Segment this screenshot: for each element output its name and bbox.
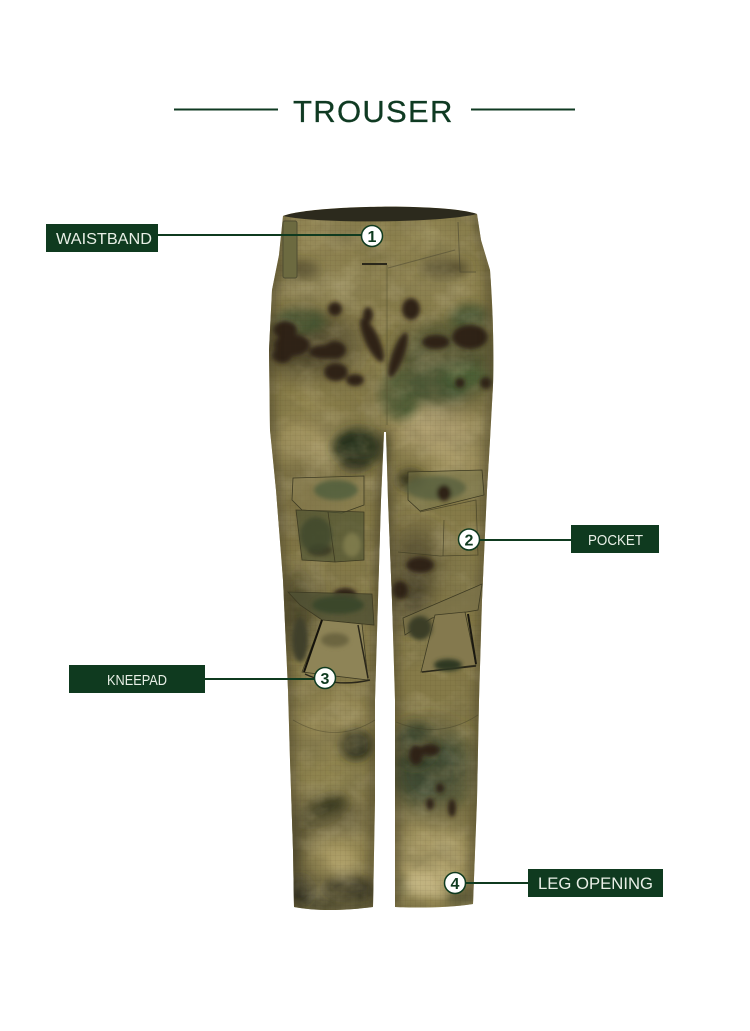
marker 3 — [314, 668, 336, 688]
label: POCKET — [571, 525, 659, 553]
trousers illustration — [260, 200, 500, 920]
edge shading — [269, 214, 493, 907]
kneepad panels — [288, 584, 482, 732]
waistband inner shadow — [283, 207, 477, 221]
marker 2 — [458, 529, 480, 550]
label: WAISTBAND — [46, 224, 158, 252]
label: KNEEPAD — [69, 665, 205, 693]
callout: kneepad — [69, 665, 336, 693]
callout: waistband — [46, 224, 382, 252]
title: TROUSER: TROUSER — [293, 94, 454, 129]
label: WAISTBAND: WAISTBAND — [56, 231, 152, 248]
label: LEG OPENING — [528, 869, 663, 897]
marker 3: 3 — [321, 671, 330, 688]
callout: pocket — [458, 525, 659, 553]
label: KNEEPAD: KNEEPAD — [107, 673, 167, 689]
pockets — [292, 470, 484, 562]
marker 2: 2 — [465, 532, 474, 550]
callout: leg opening — [444, 869, 663, 897]
marker 1 — [362, 226, 382, 246]
dark brown spots — [272, 298, 492, 817]
marker 4 — [444, 872, 466, 894]
label: LEG OPENING: LEG OPENING — [538, 875, 653, 893]
label: POCKET: POCKET — [588, 533, 643, 549]
marker 4: 4 — [451, 876, 460, 893]
marker 1: 1 — [368, 229, 377, 246]
belt loops and fly — [283, 221, 476, 425]
